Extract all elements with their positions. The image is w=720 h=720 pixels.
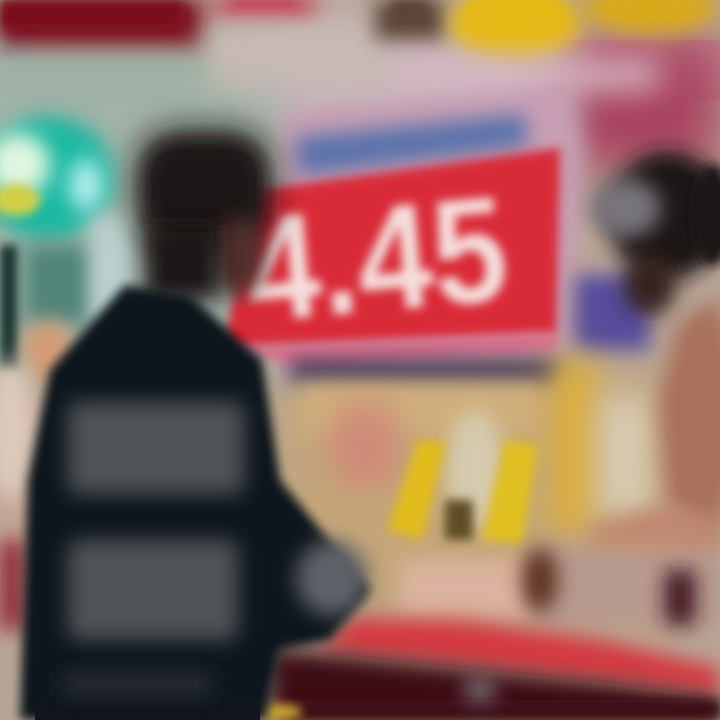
sign price text: 4.45 <box>238 164 514 354</box>
top awning and yellow blobs <box>0 0 718 105</box>
teal sign at left <box>0 116 130 630</box>
sleeve cuff <box>296 540 368 616</box>
head <box>138 130 270 250</box>
sign panel <box>222 85 585 382</box>
yellow bottles <box>388 440 538 545</box>
hem strip <box>62 672 212 696</box>
blue panel and counter background <box>300 275 653 530</box>
right man <box>589 151 720 550</box>
jacket <box>20 285 370 720</box>
counter <box>258 545 720 720</box>
back panel lower <box>68 540 238 640</box>
left man <box>20 130 370 720</box>
back panel upper <box>68 402 244 494</box>
